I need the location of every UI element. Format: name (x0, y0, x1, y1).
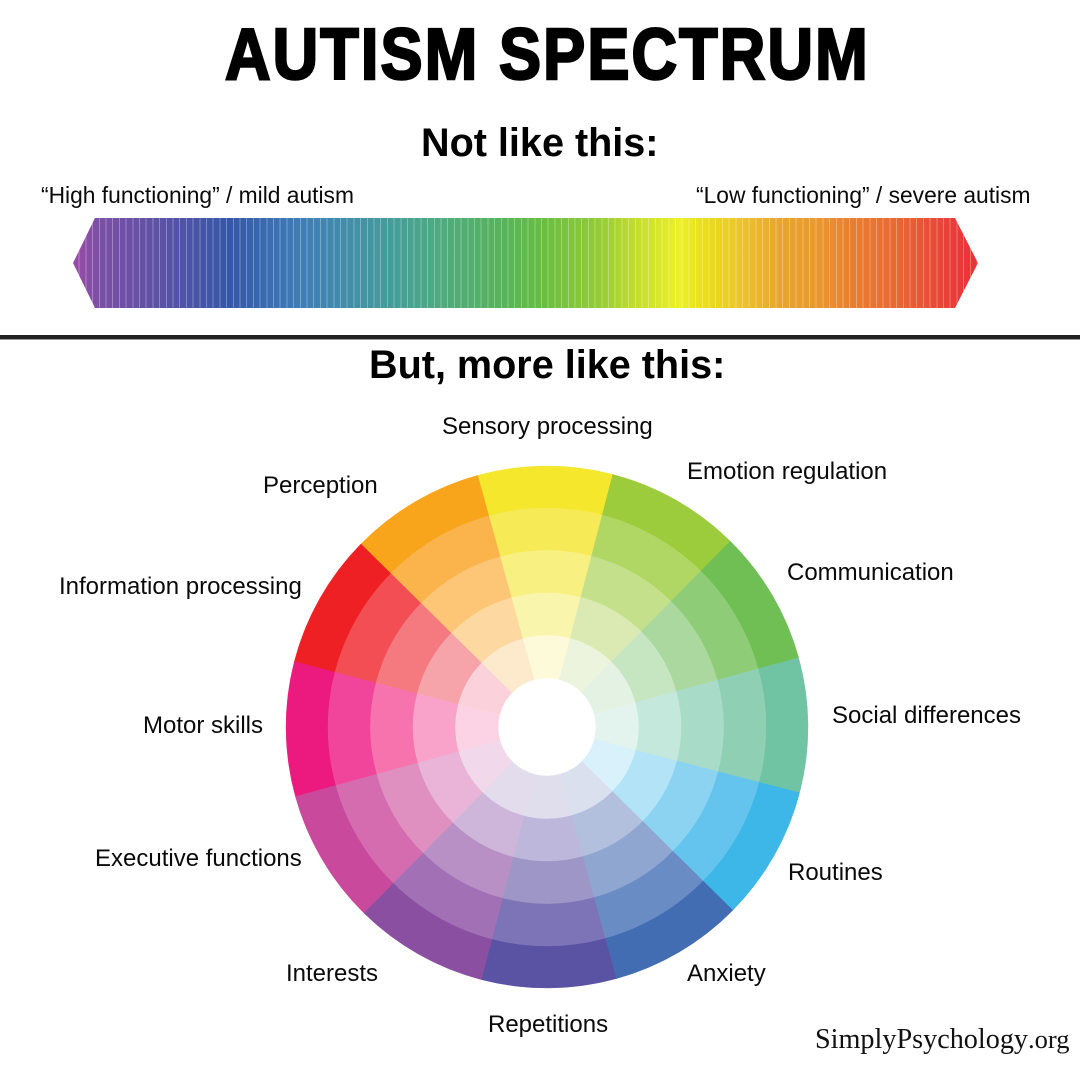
label: motor skills: Motor skills (143, 712, 263, 739)
heading: not like this: Not like this: (421, 121, 658, 165)
linear spectrum bar (73, 218, 978, 308)
label: information processing: Information processing (59, 573, 302, 600)
label: routines: Routines (788, 859, 883, 886)
label: perception: Perception (263, 472, 378, 499)
sector: sensory processing (yellow) (478, 466, 614, 680)
sector: social differences (teal) (594, 658, 808, 794)
sector: anxiety (blue) (513, 734, 737, 986)
label: social differences: Social differences (832, 702, 1021, 729)
label: anxiety: Anxiety (687, 960, 766, 987)
sector: routines (sky blue) (555, 692, 807, 915)
label: sensory processing: Sensory processing (442, 413, 653, 440)
title: AUTISM SPECTRUM (225, 15, 870, 95)
sector: repetitions (indigo) (480, 774, 616, 988)
sector: motor skills (pink) (286, 660, 500, 796)
sector: executive functions (magenta) (288, 693, 540, 917)
label: communication: Communication (787, 559, 954, 586)
label: interests: Interests (286, 960, 378, 987)
label: executive functions: Executive functions (95, 845, 302, 872)
label: repetitions: Repetitions (488, 1011, 608, 1038)
divider (0, 335, 1080, 340)
sector: information processing (red) (287, 539, 539, 762)
label: emotion regulation: Emotion regulation (687, 458, 887, 485)
heading: more like this: But, more like this: (369, 343, 725, 387)
sector: emotion regulation (lime) (512, 467, 735, 719)
sector: perception (orange) (357, 468, 581, 720)
label: low functioning: “Low functioning” / severe autism (696, 182, 1031, 208)
footer brand: SimplyPsychology.org (815, 1024, 1070, 1055)
label: high functioning: “High functioning” / mild autism (41, 182, 354, 208)
sector: interests (purple) (359, 735, 582, 987)
sector: communication (green) (554, 537, 806, 761)
